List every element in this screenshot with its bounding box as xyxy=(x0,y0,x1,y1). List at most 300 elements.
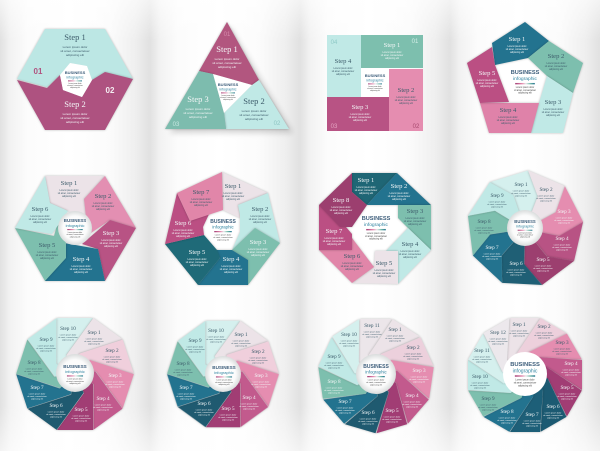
label: step 12 xyxy=(488,330,508,346)
label: step 10 xyxy=(58,326,78,342)
label: step 8: sit amet, consectetuer xyxy=(24,370,44,373)
label: step 4: Step 4 xyxy=(223,256,240,263)
label: step 3: adipiscing elit xyxy=(556,353,568,356)
label: step 5: adipiscing elit xyxy=(190,264,204,267)
label: step 4 xyxy=(561,361,581,377)
segment: step 8 xyxy=(319,173,367,227)
segment: step 3 xyxy=(69,357,134,408)
label: step 9: adipiscing elit xyxy=(482,409,494,412)
label: step 7: Lorem ipsum dolor xyxy=(484,253,501,255)
label: step 10: adipiscing elit xyxy=(474,387,486,390)
label: step 1: sit amet, consectetuer xyxy=(385,337,405,340)
label: step 12: sit amet, consectetuer xyxy=(488,340,508,343)
segment: step 8 xyxy=(167,341,228,390)
label: step 3 xyxy=(409,368,429,384)
segment: step 6 xyxy=(178,364,237,427)
label: step 2: Lorem ipsum dolor xyxy=(242,109,266,113)
label: step 5 xyxy=(71,407,91,423)
label: step 2 xyxy=(545,53,567,71)
label: step 3: sit amet, consectetuer xyxy=(404,220,426,223)
label: step 2 xyxy=(534,324,554,340)
label: step 7 xyxy=(482,245,502,261)
label: step 2: Step 2 xyxy=(539,187,553,193)
label: step 7: adipiscing elit xyxy=(327,243,341,246)
label: step 8 xyxy=(497,409,517,425)
label: step 4: Lorem ipsum dolor xyxy=(404,401,421,403)
segment: step 1 xyxy=(507,318,540,375)
label: step 10 xyxy=(470,374,490,390)
label: step 8: adipiscing elit xyxy=(177,374,189,377)
label: step 1 xyxy=(381,42,403,60)
segment: step 2 xyxy=(218,341,279,390)
label: step 6: Step 6 xyxy=(32,206,49,213)
segment: step 4 xyxy=(386,228,431,284)
label: step 4 xyxy=(399,241,421,259)
label: step 5 xyxy=(186,249,208,267)
label: step 2 xyxy=(249,206,271,224)
label: step 2: Lorem ipsum dolor xyxy=(546,62,566,65)
label: step 1: sit amet, consectetuer xyxy=(355,189,377,192)
segment: step 2 xyxy=(509,317,566,382)
label: step 2: Step 2 xyxy=(548,53,564,60)
label: step 8 xyxy=(173,361,193,377)
label: step 2: adipiscing elit xyxy=(96,208,110,211)
label: step 10 xyxy=(206,328,226,344)
segment: step 1 xyxy=(199,22,259,85)
label: step 7: Lorem ipsum dolor xyxy=(178,393,195,395)
label: step 2: Step 2 xyxy=(252,206,268,213)
label: step 1: sit amet, consectetuer xyxy=(231,342,251,345)
segment: step 3 xyxy=(516,186,584,249)
segment: step 10 xyxy=(468,360,525,393)
label: step 5: sit amet, consectetuer xyxy=(476,82,498,85)
panel: heptagon 7 steps xyxy=(165,172,280,285)
label: step 2: adipiscing elit xyxy=(538,337,550,340)
label: step 5: sit amet, consectetuer xyxy=(373,272,395,275)
label: step 4: adipiscing elit xyxy=(565,374,577,377)
label: step 6: adipiscing elit xyxy=(176,235,190,238)
label: step 5: Step 5 xyxy=(221,406,235,412)
label: step 8: Step 8 xyxy=(477,219,491,225)
label: step 5: adipiscing elit xyxy=(377,275,391,278)
label: step 9: adipiscing elit xyxy=(491,206,503,209)
label: step 3: Step 3 xyxy=(407,208,424,215)
label: step 1: Step 1 xyxy=(64,32,86,42)
label: step 5 xyxy=(382,408,402,424)
label: step 3: Step 3 xyxy=(545,99,562,106)
label: step 1: Lorem ipsum dolor xyxy=(507,45,527,48)
label: step 9: Lorem ipsum dolor xyxy=(38,345,55,347)
label: step 8: Step 8 xyxy=(176,361,190,367)
label: step 6: Lorem ipsum dolor xyxy=(173,229,193,232)
label: step 8: Step 8 xyxy=(500,409,514,415)
label: step 8 xyxy=(324,379,344,395)
label: step 10: Step 10 xyxy=(60,326,76,332)
label: step 5: Lorem ipsum dolor xyxy=(535,265,552,267)
segment: step 1 xyxy=(492,22,549,65)
label: step 8: sit amet, consectetuer xyxy=(330,209,352,212)
label: step 8: adipiscing elit xyxy=(501,422,513,425)
segment: step 2 xyxy=(528,41,583,93)
label: step 9: sit amet, consectetuer xyxy=(185,348,205,351)
label: step 1 xyxy=(231,332,251,348)
label: step 3 xyxy=(183,94,213,119)
label: step 10: Lorem ipsum dolor xyxy=(60,334,77,336)
label: step 9: adipiscing elit xyxy=(40,350,52,353)
segment: step 5 xyxy=(507,217,574,286)
label: step 11 xyxy=(362,323,382,339)
label: step 4: sit amet, consectetuer xyxy=(561,371,581,374)
center disc xyxy=(356,354,396,394)
segment: step 3 xyxy=(531,76,573,133)
segment: step 6 xyxy=(345,370,392,434)
segment: step 2 xyxy=(389,69,423,131)
label: step 4: Step 4 xyxy=(564,361,578,367)
label: step 2: Lorem ipsum dolor xyxy=(250,357,267,359)
label: step 2: adipiscing elit xyxy=(407,358,419,361)
label: step 4: Lorem ipsum dolor xyxy=(333,67,353,70)
number 02: 02 xyxy=(274,121,281,127)
label: step 1: Step 1 xyxy=(512,322,526,328)
label: step 1: Step 1 xyxy=(234,332,248,338)
segment: step 1 xyxy=(45,176,105,215)
segment: step 6 xyxy=(319,238,374,283)
label: step 3: sit amet, consectetuer xyxy=(105,383,125,386)
segment: step 7 xyxy=(177,172,223,221)
label: step 4: sit amet, consectetuer xyxy=(239,405,259,408)
label: step 1: adipiscing elit xyxy=(66,53,84,57)
label: step 1: Step 1 xyxy=(388,327,402,333)
label: step 4 xyxy=(70,256,92,274)
label: step 11: Step 11 xyxy=(364,323,380,329)
label: step 12: Lorem ipsum dolor xyxy=(490,338,507,340)
label: step 8 xyxy=(24,360,44,376)
label: step 2 xyxy=(92,193,114,211)
label: step 8: Lorem ipsum dolor xyxy=(331,206,351,209)
segment: step 5 xyxy=(206,374,240,427)
label: step 4: adipiscing elit xyxy=(224,271,238,274)
label: step 6: adipiscing elit xyxy=(50,416,62,419)
segment: step 4 xyxy=(45,243,105,281)
label: step 5: Lorem ipsum dolor xyxy=(384,416,401,418)
center text xyxy=(218,82,239,101)
label: step 8: Lorem ipsum dolor xyxy=(499,417,516,419)
label: step 2: Step 2 xyxy=(95,193,111,200)
label: step 3: Lorem ipsum dolor xyxy=(248,248,268,251)
label: step 4: adipiscing elit xyxy=(501,122,515,125)
label: step 5: sit amet, consectetuer xyxy=(382,418,402,421)
label: step 6: Step 6 xyxy=(546,404,560,410)
label: step 8 xyxy=(474,219,494,235)
label: step 1: Step 1 xyxy=(61,180,77,187)
label: step 4 xyxy=(402,393,422,409)
label: step 1: adipiscing elit xyxy=(218,65,236,69)
label: step 5: Lorem ipsum dolor xyxy=(559,393,576,395)
panel: dodecagon 12 steps xyxy=(467,317,583,433)
label: step 3: adipiscing elit xyxy=(558,222,570,225)
segment: step 5 xyxy=(352,251,398,284)
segment: step 2 xyxy=(84,176,136,235)
label: step 3 xyxy=(100,230,122,248)
label: step 9: Step 9 xyxy=(327,354,341,360)
label: step 6 xyxy=(194,401,214,417)
segment: step 2 xyxy=(17,72,133,130)
label: step 10: sit amet, consectetuer xyxy=(470,384,490,387)
label: step 3: sit amet, consectetuer xyxy=(251,383,271,386)
label: step 5: adipiscing elit xyxy=(75,420,87,423)
segment: step 5 xyxy=(165,235,220,285)
label: step 11: adipiscing elit xyxy=(366,336,378,339)
label: step 4: Lorem ipsum dolor xyxy=(71,265,91,268)
label: step 6 xyxy=(506,261,526,277)
label: step 5: Lorem ipsum dolor xyxy=(187,258,207,261)
label: step 9: sit amet, consectetuer xyxy=(478,406,498,409)
label: step 3: Lorem ipsum dolor xyxy=(101,239,121,242)
label: step 3: sit amet, consectetuer xyxy=(247,251,269,254)
label: step 5: adipiscing elit xyxy=(386,421,398,424)
label: step 7: Step 7 xyxy=(30,385,44,391)
label: step 7 xyxy=(323,228,345,246)
label: step 7: adipiscing elit xyxy=(339,412,351,415)
label: step 7: sit amet, consectetuer xyxy=(335,409,355,412)
number 04: 04 xyxy=(331,40,338,46)
label: step 6: sit amet, consectetuer xyxy=(341,265,363,268)
label: step 7: Lorem ipsum dolor xyxy=(524,420,541,422)
label: step 4: Step 4 xyxy=(405,393,419,399)
label: step 3: Lorem ipsum dolor xyxy=(543,108,563,111)
label: step 7: adipiscing elit xyxy=(194,204,208,207)
label: step 1: Lorem ipsum dolor xyxy=(63,45,87,49)
label: step 1: Lorem ipsum dolor xyxy=(387,335,404,337)
center text xyxy=(64,218,86,238)
label: step 1 xyxy=(355,177,377,195)
label: step 6 xyxy=(543,404,563,420)
segment: step 8 xyxy=(484,368,541,433)
label: step 1: adipiscing elit xyxy=(235,345,247,348)
segment: step 7 xyxy=(319,205,352,250)
label: step 1: Step 1 xyxy=(384,42,400,49)
label: step 7: sit amet, consectetuer xyxy=(176,395,196,398)
label: step 8 xyxy=(330,197,352,215)
label: step 10: Lorem ipsum dolor xyxy=(208,336,225,338)
label: step 7: Lorem ipsum dolor xyxy=(324,237,344,240)
label: step 5: sit amet, consectetuer xyxy=(218,416,238,419)
label: step 10: adipiscing elit xyxy=(210,341,222,344)
label: step 4: adipiscing elit xyxy=(556,249,568,252)
label: step 4: sit amet, consectetuer xyxy=(497,119,519,122)
label: step 9: Lorem ipsum dolor xyxy=(187,346,204,348)
segment: step 6 xyxy=(165,193,210,244)
segment: step 3 xyxy=(82,220,136,281)
label: step 2 xyxy=(536,187,556,203)
segment: step 5 xyxy=(361,370,408,433)
label: step 1: adipiscing elit xyxy=(513,335,525,338)
label: step 7: Step 7 xyxy=(179,385,193,391)
segment: step 1 xyxy=(490,170,546,235)
segment: step 7 xyxy=(323,363,387,425)
label: step 5: Lorem ipsum dolor xyxy=(37,251,57,254)
label: step 1: Step 1 xyxy=(225,183,241,190)
label: step 6: Lorem ipsum dolor xyxy=(508,269,525,271)
label: step 2: sit amet, consectetuer xyxy=(239,113,269,117)
label: step 9: sit amet, consectetuer xyxy=(36,347,56,350)
label: step 10: adipiscing elit xyxy=(343,345,355,348)
segment: step 4 xyxy=(520,210,583,263)
label: step 4: sit amet, consectetuer xyxy=(93,406,113,409)
label: step 2: Step 2 xyxy=(243,96,265,106)
label: step 2: Lorem ipsum dolor xyxy=(104,356,121,358)
label: step 4: sit amet, consectetuer xyxy=(220,268,242,271)
label: step 6: adipiscing elit xyxy=(198,414,210,417)
label: step 3: Lorem ipsum dolor xyxy=(554,348,571,350)
center text xyxy=(514,219,536,239)
label: step 10: sit amet, consectetuer xyxy=(58,336,78,339)
label: step 8: Step 8 xyxy=(333,197,350,204)
panel: hendecagon 11 steps xyxy=(318,319,434,434)
label: step 3: sit amet, consectetuer xyxy=(349,116,371,119)
label: step 5: Lorem ipsum dolor xyxy=(374,269,394,272)
segment: step 8 xyxy=(16,340,81,391)
label: step 11: Step 11 xyxy=(474,348,490,354)
label: step 2: Step 2 xyxy=(251,349,265,355)
label: step 6: adipiscing elit xyxy=(33,221,47,224)
segment: step 6 xyxy=(512,366,569,432)
label: step 2: adipiscing elit xyxy=(392,198,406,201)
center disc xyxy=(503,352,547,396)
label: step 2: sit amet, consectetuer xyxy=(60,116,90,120)
segment: step 4 xyxy=(327,35,361,97)
label: step 11 xyxy=(472,348,492,364)
label: step 1: Lorem ipsum dolor xyxy=(223,192,243,195)
segment: step 7 xyxy=(167,358,228,407)
label: step 5 xyxy=(476,70,498,88)
segment: step 10 xyxy=(206,321,240,374)
label: step 7: adipiscing elit xyxy=(486,258,498,261)
label: step 6: sit amet, consectetuer xyxy=(172,232,194,235)
label: step 4: Lorem ipsum dolor xyxy=(400,250,420,253)
label: step 4 xyxy=(332,58,354,76)
segment: step 10 xyxy=(331,319,389,384)
segment: step 9 xyxy=(468,362,534,419)
center disc xyxy=(56,354,94,392)
number 03: 03 xyxy=(331,124,338,130)
label: step 1 xyxy=(509,322,529,338)
label: step 1: adipiscing elit xyxy=(226,198,240,201)
label: step 1: adipiscing elit xyxy=(62,195,76,198)
label: step 11: sit amet, consectetuer xyxy=(362,333,382,336)
label: step 7: Step 7 xyxy=(338,399,352,405)
label: step 3 xyxy=(247,239,269,257)
segment: step 4 xyxy=(366,362,429,424)
segment: step 3 xyxy=(232,228,280,285)
label: step 2: sit amet, consectetuer xyxy=(403,355,423,358)
label: step 3: Step 3 xyxy=(352,104,369,111)
label: step 1: sit amet, consectetuer xyxy=(212,61,242,65)
label: step 6: sit amet, consectetuer xyxy=(29,218,51,221)
center text xyxy=(363,364,389,386)
segment: step 5 xyxy=(518,359,583,416)
label: step 9: sit amet, consectetuer xyxy=(324,364,344,367)
label: step 5: Step 5 xyxy=(385,408,399,414)
label: step 6: sit amet, consectetuer xyxy=(543,414,563,417)
segment: step 11 xyxy=(359,319,392,375)
label: step 9: adipiscing elit xyxy=(328,367,340,370)
segment: step 7 xyxy=(510,375,543,432)
label: step 7 xyxy=(335,399,355,415)
segment: step 2 xyxy=(69,340,134,391)
segment: step 5 xyxy=(467,47,509,103)
label: step 4: Step 4 xyxy=(96,396,110,402)
label: step 10 xyxy=(339,332,359,348)
label: step 5: adipiscing elit xyxy=(480,85,494,88)
label: step 10: sit amet, consectetuer xyxy=(206,338,226,341)
segment: step 3 xyxy=(327,97,389,131)
label: step 12: adipiscing elit xyxy=(492,343,504,346)
label: step 1: sit amet, consectetuer xyxy=(506,48,528,51)
label: step 10: Lorem ipsum dolor xyxy=(341,340,358,342)
label: step 3: sit amet, consectetuer xyxy=(100,242,122,245)
segment: step 3 xyxy=(516,331,582,388)
number 02: 02 xyxy=(413,124,420,130)
number 03: 03 xyxy=(173,122,180,128)
label: step 4: sit amet, consectetuer xyxy=(70,268,92,271)
label: step 5: Step 5 xyxy=(479,70,496,77)
label: step 1 xyxy=(385,327,405,343)
label: step 7: sit amet, consectetuer xyxy=(190,201,212,204)
label: step 8: sit amet, consectetuer xyxy=(324,389,344,392)
label: step 5 xyxy=(36,242,58,260)
label: step 2: adipiscing elit xyxy=(66,120,84,124)
number 01: 01 xyxy=(34,67,43,76)
label: step 2: adipiscing elit xyxy=(540,200,552,203)
label: step 7: Lorem ipsum dolor xyxy=(29,393,46,395)
label: step 5: Lorem ipsum dolor xyxy=(477,79,497,82)
label: step 4: adipiscing elit xyxy=(403,256,417,259)
label: step 10: Step 10 xyxy=(472,374,488,380)
label: step 1: Step 1 xyxy=(358,177,374,184)
label: step 5: sit amet, consectetuer xyxy=(533,267,553,270)
label: step 9 xyxy=(324,354,344,370)
label: step 6: Lorem ipsum dolor xyxy=(342,262,362,265)
segment: step 6 xyxy=(500,228,545,285)
label: step 1: Lorem ipsum dolor xyxy=(382,51,402,54)
label: step 3: Step 3 xyxy=(254,373,268,379)
center disc xyxy=(58,211,92,245)
center text xyxy=(65,70,86,89)
segment: step 10 xyxy=(57,318,93,374)
center text xyxy=(210,219,236,242)
segment: step 4 xyxy=(480,103,539,133)
center text xyxy=(365,73,386,92)
label: step 9: Lorem ipsum dolor xyxy=(489,201,506,203)
segment: step 4 xyxy=(525,357,582,390)
label: step 7: sit amet, consectetuer xyxy=(323,240,345,243)
label: step 3: Step 3 xyxy=(555,340,569,346)
segment: step 9 xyxy=(468,181,537,246)
label: step 6 xyxy=(172,220,194,238)
label: step 5: Lorem ipsum dolor xyxy=(220,414,237,416)
label: step 5 xyxy=(218,406,238,422)
label: step 6: Lorem ipsum dolor xyxy=(196,409,213,411)
segment: step 8 xyxy=(468,207,527,256)
label: step 3: Lorem ipsum dolor xyxy=(186,107,210,111)
label: step 9 xyxy=(36,337,56,353)
label: step 11: Lorem ipsum dolor xyxy=(364,331,381,333)
label: step 3: Lorem ipsum dolor xyxy=(411,376,428,378)
label: step 7: Step 7 xyxy=(525,412,539,418)
label: step 3: sit amet, consectetuer xyxy=(183,111,213,115)
label: step 2: adipiscing elit xyxy=(252,362,264,365)
